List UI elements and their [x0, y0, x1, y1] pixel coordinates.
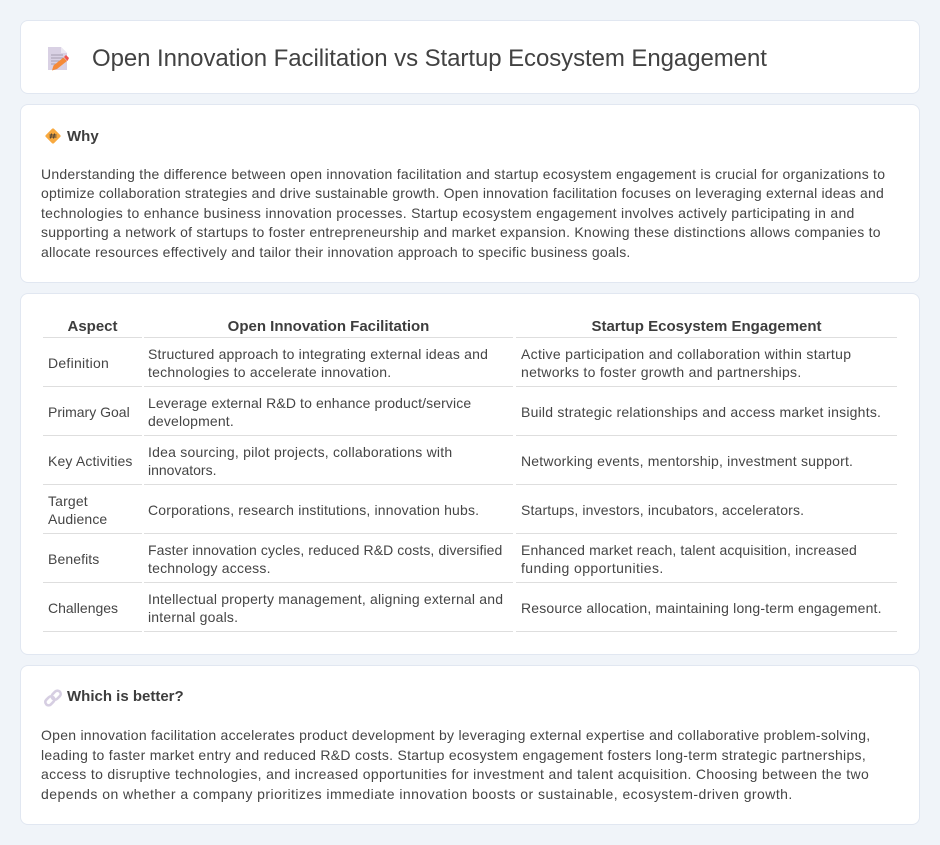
heading: which is better: Which is better?	[67, 688, 184, 705]
row: primary goal: Build strategic relationships and access market insights.	[521, 404, 881, 420]
heading: why: Why	[67, 128, 99, 145]
text block: which is better body: leading to faster market entry and reduced R&D costs. Startup ecosystem engagement fosters long-term strategic partnerships,	[41, 747, 866, 763]
text block: why body: supporting a network of startups to foster entrepreneurship and market expansion. Knowing these distinctions allows companies to	[41, 224, 881, 240]
row: benefits	[48, 542, 857, 576]
text block: why body: Understanding the difference between open innovation facilitation and startup ecosystem engagement is crucial for organizations to	[41, 166, 885, 182]
row: definition: networks to foster growth and partnerships.	[521, 364, 802, 380]
text block: why body: optimize collaboration strategies and drive sustainable growth. Open innovation facilitation focuses on leveraging external ideas and	[41, 185, 884, 201]
text block: which is better body: Open innovation facilitation accelerates product development by leveraging external expertise and collaborative problem-solving,	[41, 727, 870, 743]
row: challenges: Challenges	[48, 600, 118, 616]
panel: header	[20, 20, 920, 94]
row: primary goal: development.	[148, 413, 234, 429]
row: definition	[48, 346, 851, 380]
panel: which is better	[20, 665, 920, 825]
row: target audience: Startups, investors, incubators, accelerators.	[521, 502, 804, 518]
row: key activities	[48, 444, 853, 478]
panel: comparison table	[20, 293, 920, 655]
title: Open Innovation Facilitation vs Startup Ecosystem Engagement	[92, 45, 767, 72]
row: challenges	[48, 591, 882, 625]
panel: why	[20, 104, 920, 283]
row: primary goal: Primary Goal	[48, 404, 130, 420]
row: definition: technologies to accelerate innovation.	[148, 364, 391, 380]
row: target audience: Audience	[48, 511, 107, 527]
text block: why body	[41, 166, 885, 260]
text block: why body: allocate resources effectively and tailor their innovation approach to specific business goals.	[41, 244, 631, 260]
icon: document with pencil	[48, 47, 69, 70]
row: key activities: Idea sourcing, pilot projects, collaborations with	[148, 444, 452, 460]
row: primary goal	[48, 395, 881, 429]
table header: Open Innovation Facilitation	[228, 318, 429, 335]
table header: Startup Ecosystem Engagement	[591, 318, 822, 335]
row: target audience: Corporations, research institutions, innovation hubs.	[148, 502, 479, 518]
text block: which is better body: access to disruptive technologies, and increased opportunities for investment and talent acquisition. Choosing between the two	[41, 766, 869, 782]
row: key activities: Networking events, mentorship, investment support.	[521, 453, 853, 469]
row: benefits: Enhanced market reach, talent acquisition, increased	[521, 542, 857, 558]
row: key activities: innovators.	[148, 462, 216, 478]
row: benefits: Faster innovation cycles, reduced R&D costs, diversified	[148, 542, 502, 558]
row: challenges: Intellectual property management, aligning external and	[148, 591, 503, 607]
table header: Aspect	[67, 318, 118, 335]
row: benefits: technology access.	[148, 560, 271, 576]
row: primary goal: Leverage external R&D to enhance product/service	[148, 395, 471, 411]
row: definition: Definition	[48, 355, 109, 371]
icon: warning diamond	[45, 128, 61, 144]
row: target audience: Target	[48, 493, 88, 509]
row: definition: Structured approach to integrating external ideas and	[148, 346, 488, 362]
row: challenges: internal goals.	[148, 609, 238, 625]
icon: link	[44, 689, 62, 707]
table header	[67, 318, 822, 335]
row: challenges: Resource allocation, maintaining long-term engagement.	[521, 600, 882, 616]
row: target audience	[48, 493, 804, 527]
text block: which is better body	[41, 727, 870, 802]
row: definition: Active participation and collaboration within startup	[521, 346, 851, 362]
text block: why body: technologies to enhance business innovation processes. Startup ecosystem engagement involves actively participating in and	[41, 205, 855, 221]
row: benefits: funding opportunities.	[521, 560, 664, 576]
row: key activities: Key Activities	[48, 453, 133, 469]
row: benefits: Benefits	[48, 551, 99, 567]
text block: which is better body: depends on whether a company prioritizes immediate innovation boosts or sustainable, ecosystem-driven growth.	[41, 786, 793, 802]
